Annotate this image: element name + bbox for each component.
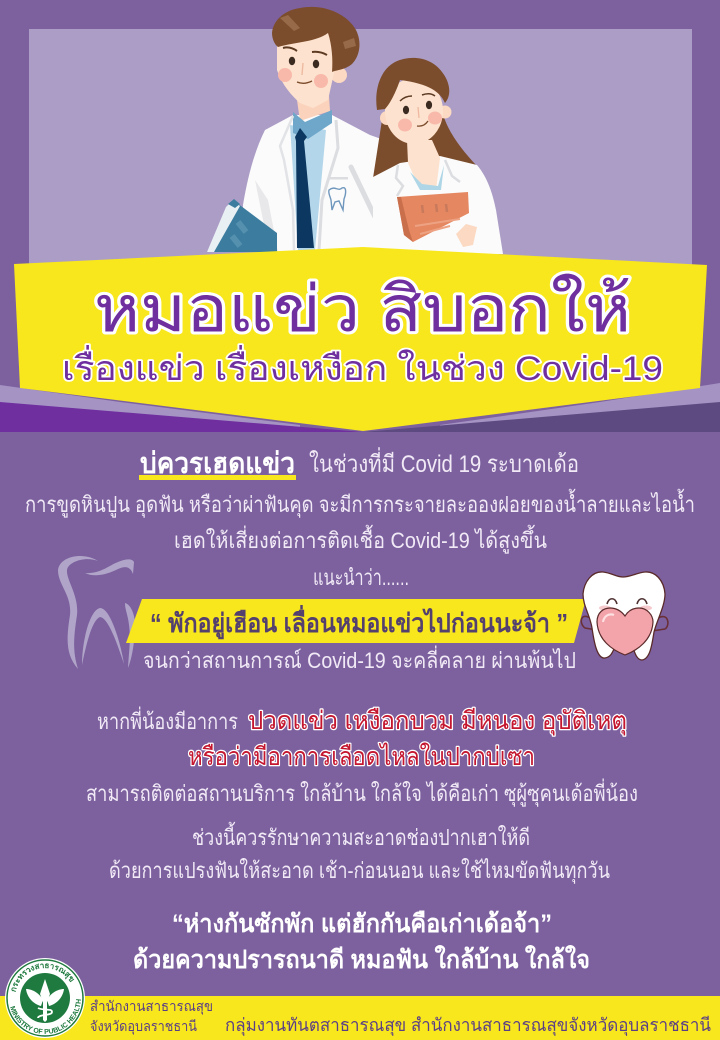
neck bbox=[297, 96, 330, 121]
neck and chest bbox=[407, 140, 440, 190]
text block: explanation: แนะนำว่า...... bbox=[313, 565, 409, 590]
illustration: male dentist bbox=[207, 7, 384, 252]
text block: symptoms bbox=[86, 706, 638, 807]
coat bbox=[360, 156, 503, 254]
text block: explanation: เฮดให้เสี่ยงต่อการติดเชื้อ Covid-19 ได้สูงขึ้น bbox=[174, 525, 547, 554]
pocket tooth bbox=[328, 177, 348, 180]
heart bbox=[597, 608, 653, 655]
tooth body bbox=[583, 572, 665, 660]
panel: hero background bbox=[29, 29, 692, 354]
sleeve crease bbox=[351, 167, 375, 217]
text block: until the situation resolves: จนกว่าสถานการณ์ Covid-19 จะคลี่คลาย ผ่านพ้นไป bbox=[143, 645, 576, 673]
blouse bbox=[410, 165, 444, 190]
text block: oral hygiene advice: ด้วยการแปรงฟันให้สะอาด เช้า-ก่อนนอน และใช้ไหมขัดฟันทุกวัน bbox=[109, 858, 610, 884]
coat bbox=[240, 115, 384, 252]
ear bbox=[331, 67, 347, 83]
shirt bbox=[290, 125, 326, 250]
text block: warning heading: บ่ควรเฮดแข่ว bbox=[140, 448, 295, 480]
band: right purple stripe bbox=[363, 383, 720, 432]
collar bbox=[293, 110, 332, 139]
provincial office name: สำนักงานสาธารณสุข bbox=[90, 998, 213, 1015]
banner: yellow title bbox=[14, 247, 707, 431]
icon: smiling tooth holding heart bbox=[581, 572, 668, 660]
icon: ministry of public health seal: กระทรวงสาธารณสุข bbox=[11, 963, 74, 992]
text block: warning heading: ในช่วงที่มี Covid 19 ระบาดเด้อ bbox=[309, 447, 579, 478]
illustration: female dentist bbox=[360, 58, 503, 254]
text block: symptoms: หากพี่น้องมีอาการ bbox=[97, 706, 238, 734]
text block: closing message bbox=[133, 910, 590, 974]
fringe bbox=[376, 58, 449, 110]
text block: symptoms: หรือว่ามีอาการเลือดไหลในปากบ่เซา bbox=[188, 742, 535, 771]
hair bbox=[272, 7, 359, 72]
text block: oral hygiene advice bbox=[109, 822, 610, 884]
band: left purple stripe bbox=[0, 385, 363, 432]
subtitle: เรื่องแข่ว เรื่องเหงือก ในช่วง Covid-19 bbox=[62, 345, 663, 388]
title: หมอแข่ว สิบอกให้ bbox=[94, 273, 631, 345]
text block: warning heading bbox=[139, 447, 579, 480]
long hair bbox=[373, 110, 476, 178]
lapels bbox=[280, 116, 294, 250]
collar bbox=[396, 160, 460, 196]
face bbox=[385, 78, 443, 144]
callout: yellow advice banner bbox=[126, 599, 586, 643]
text block: explanation bbox=[25, 489, 695, 590]
text block: closing message: “ห่างกันซักพัก แต่ฮักกันคือเก่าเด้อจ้า” bbox=[172, 910, 552, 938]
text block: symptoms: ปวดแข่ว เหงือกบวม มีหนอง อุบัติเหตุ bbox=[248, 707, 627, 736]
footer: yellow bar: จังหวัดอุบลราชธานี bbox=[90, 1018, 197, 1035]
icon: tooth outline watermark bbox=[58, 556, 135, 669]
hand bbox=[456, 224, 477, 247]
necktie bbox=[295, 128, 314, 248]
icon: ministry of public health seal bbox=[5, 958, 85, 1038]
face bbox=[277, 32, 334, 108]
footer: yellow bar bbox=[0, 996, 720, 1040]
ears bbox=[380, 111, 394, 125]
text block: closing message: ด้วยความปรารถนาดี หมอฟัน ใกล้บ้าน ใกล้ใจ bbox=[133, 944, 590, 974]
icon: ministry of public health seal: MINISTRY OF PUBLIC HEALTH bbox=[10, 999, 81, 1034]
callout: yellow advice banner: “ พักอยู่เฮือน เลื่อนหมอแข่วไปก่อนนะจ้า ” bbox=[150, 604, 568, 640]
eyes bbox=[607, 599, 647, 604]
text block: oral hygiene advice: ช่วงนี้ควรรักษาความสะอาดช่องปากเฮาให้ดี bbox=[192, 822, 530, 850]
folder bbox=[207, 200, 277, 252]
orange book bbox=[397, 192, 469, 242]
arms bbox=[581, 616, 668, 631]
